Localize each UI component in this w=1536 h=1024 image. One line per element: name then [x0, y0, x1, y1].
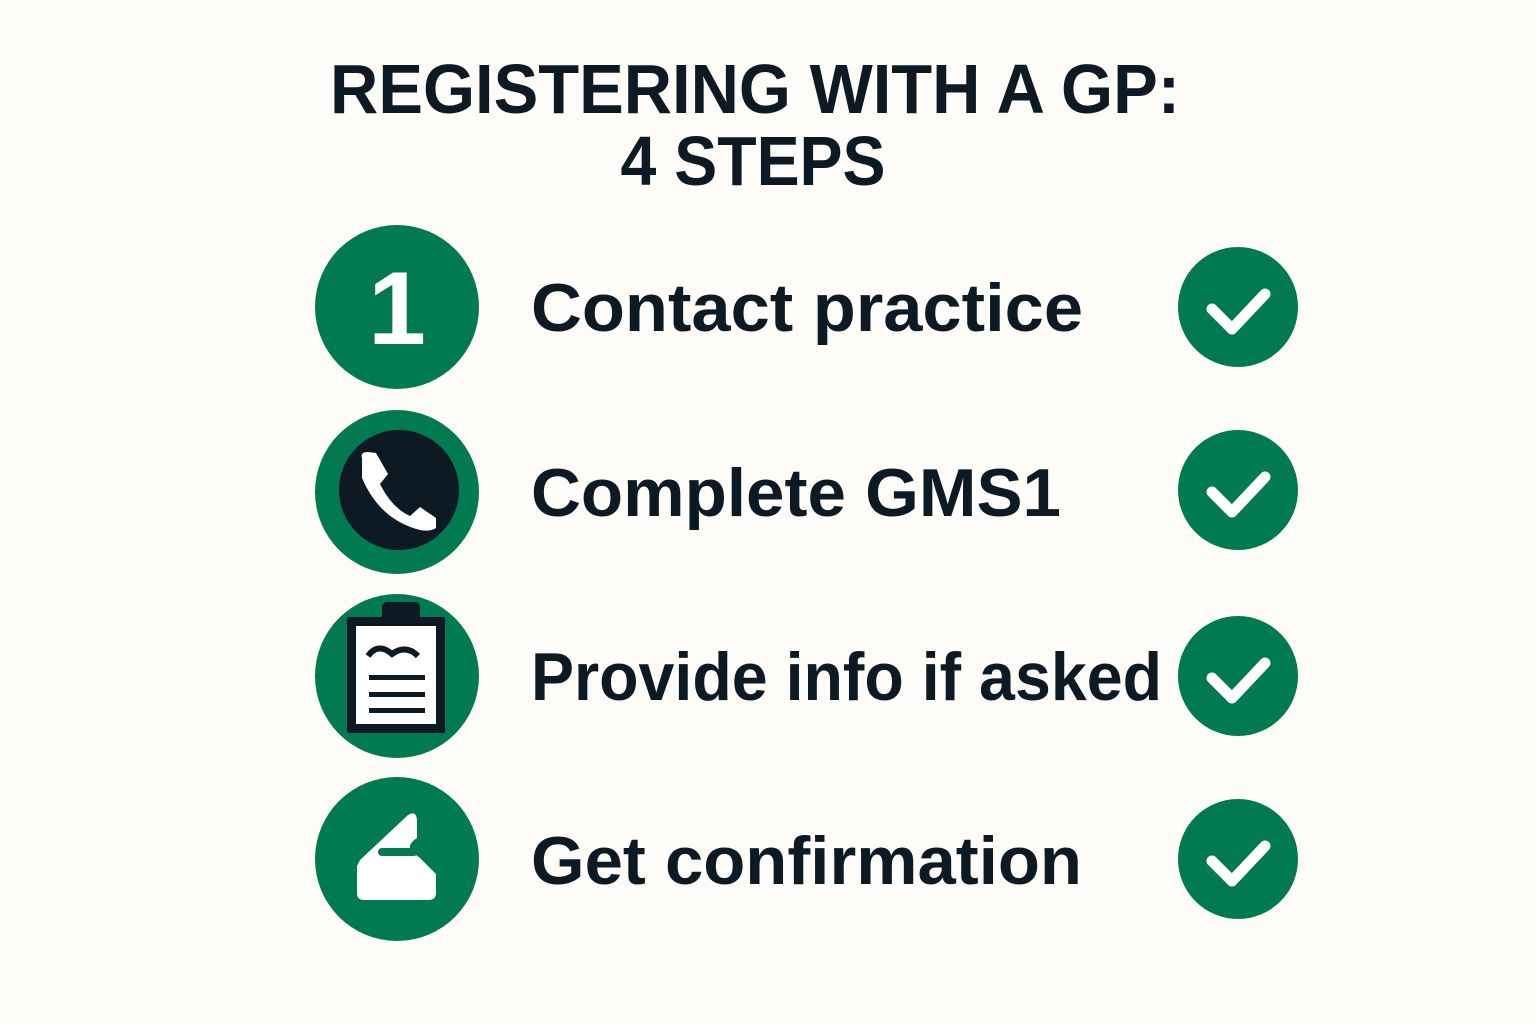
step 1 [315, 225, 1298, 389]
step 4 [315, 777, 1298, 941]
title: REGISTERING WITH A GP: [330, 50, 1180, 128]
icon: number 1 [315, 225, 479, 389]
title [330, 50, 1180, 200]
step 3 label: Provide info if asked [531, 639, 1162, 715]
step 2 [315, 410, 1298, 574]
icon: check 3 [1178, 616, 1298, 736]
title: 4 STEPS [620, 122, 886, 200]
icon: check 2 [1178, 430, 1298, 550]
step 1 label: Contact practice [531, 270, 1083, 346]
step 2 label: Complete GMS1 [531, 455, 1061, 531]
icon: confirmation [315, 777, 479, 941]
step 3 [315, 594, 1298, 758]
icon: clipboard [315, 594, 479, 758]
icon: check 4 [1178, 799, 1298, 919]
icon: number 1: 1 [368, 251, 426, 367]
step 4 label: Get confirmation [531, 823, 1082, 899]
icon: check 1 [1178, 247, 1298, 367]
icon: phone [315, 410, 479, 574]
